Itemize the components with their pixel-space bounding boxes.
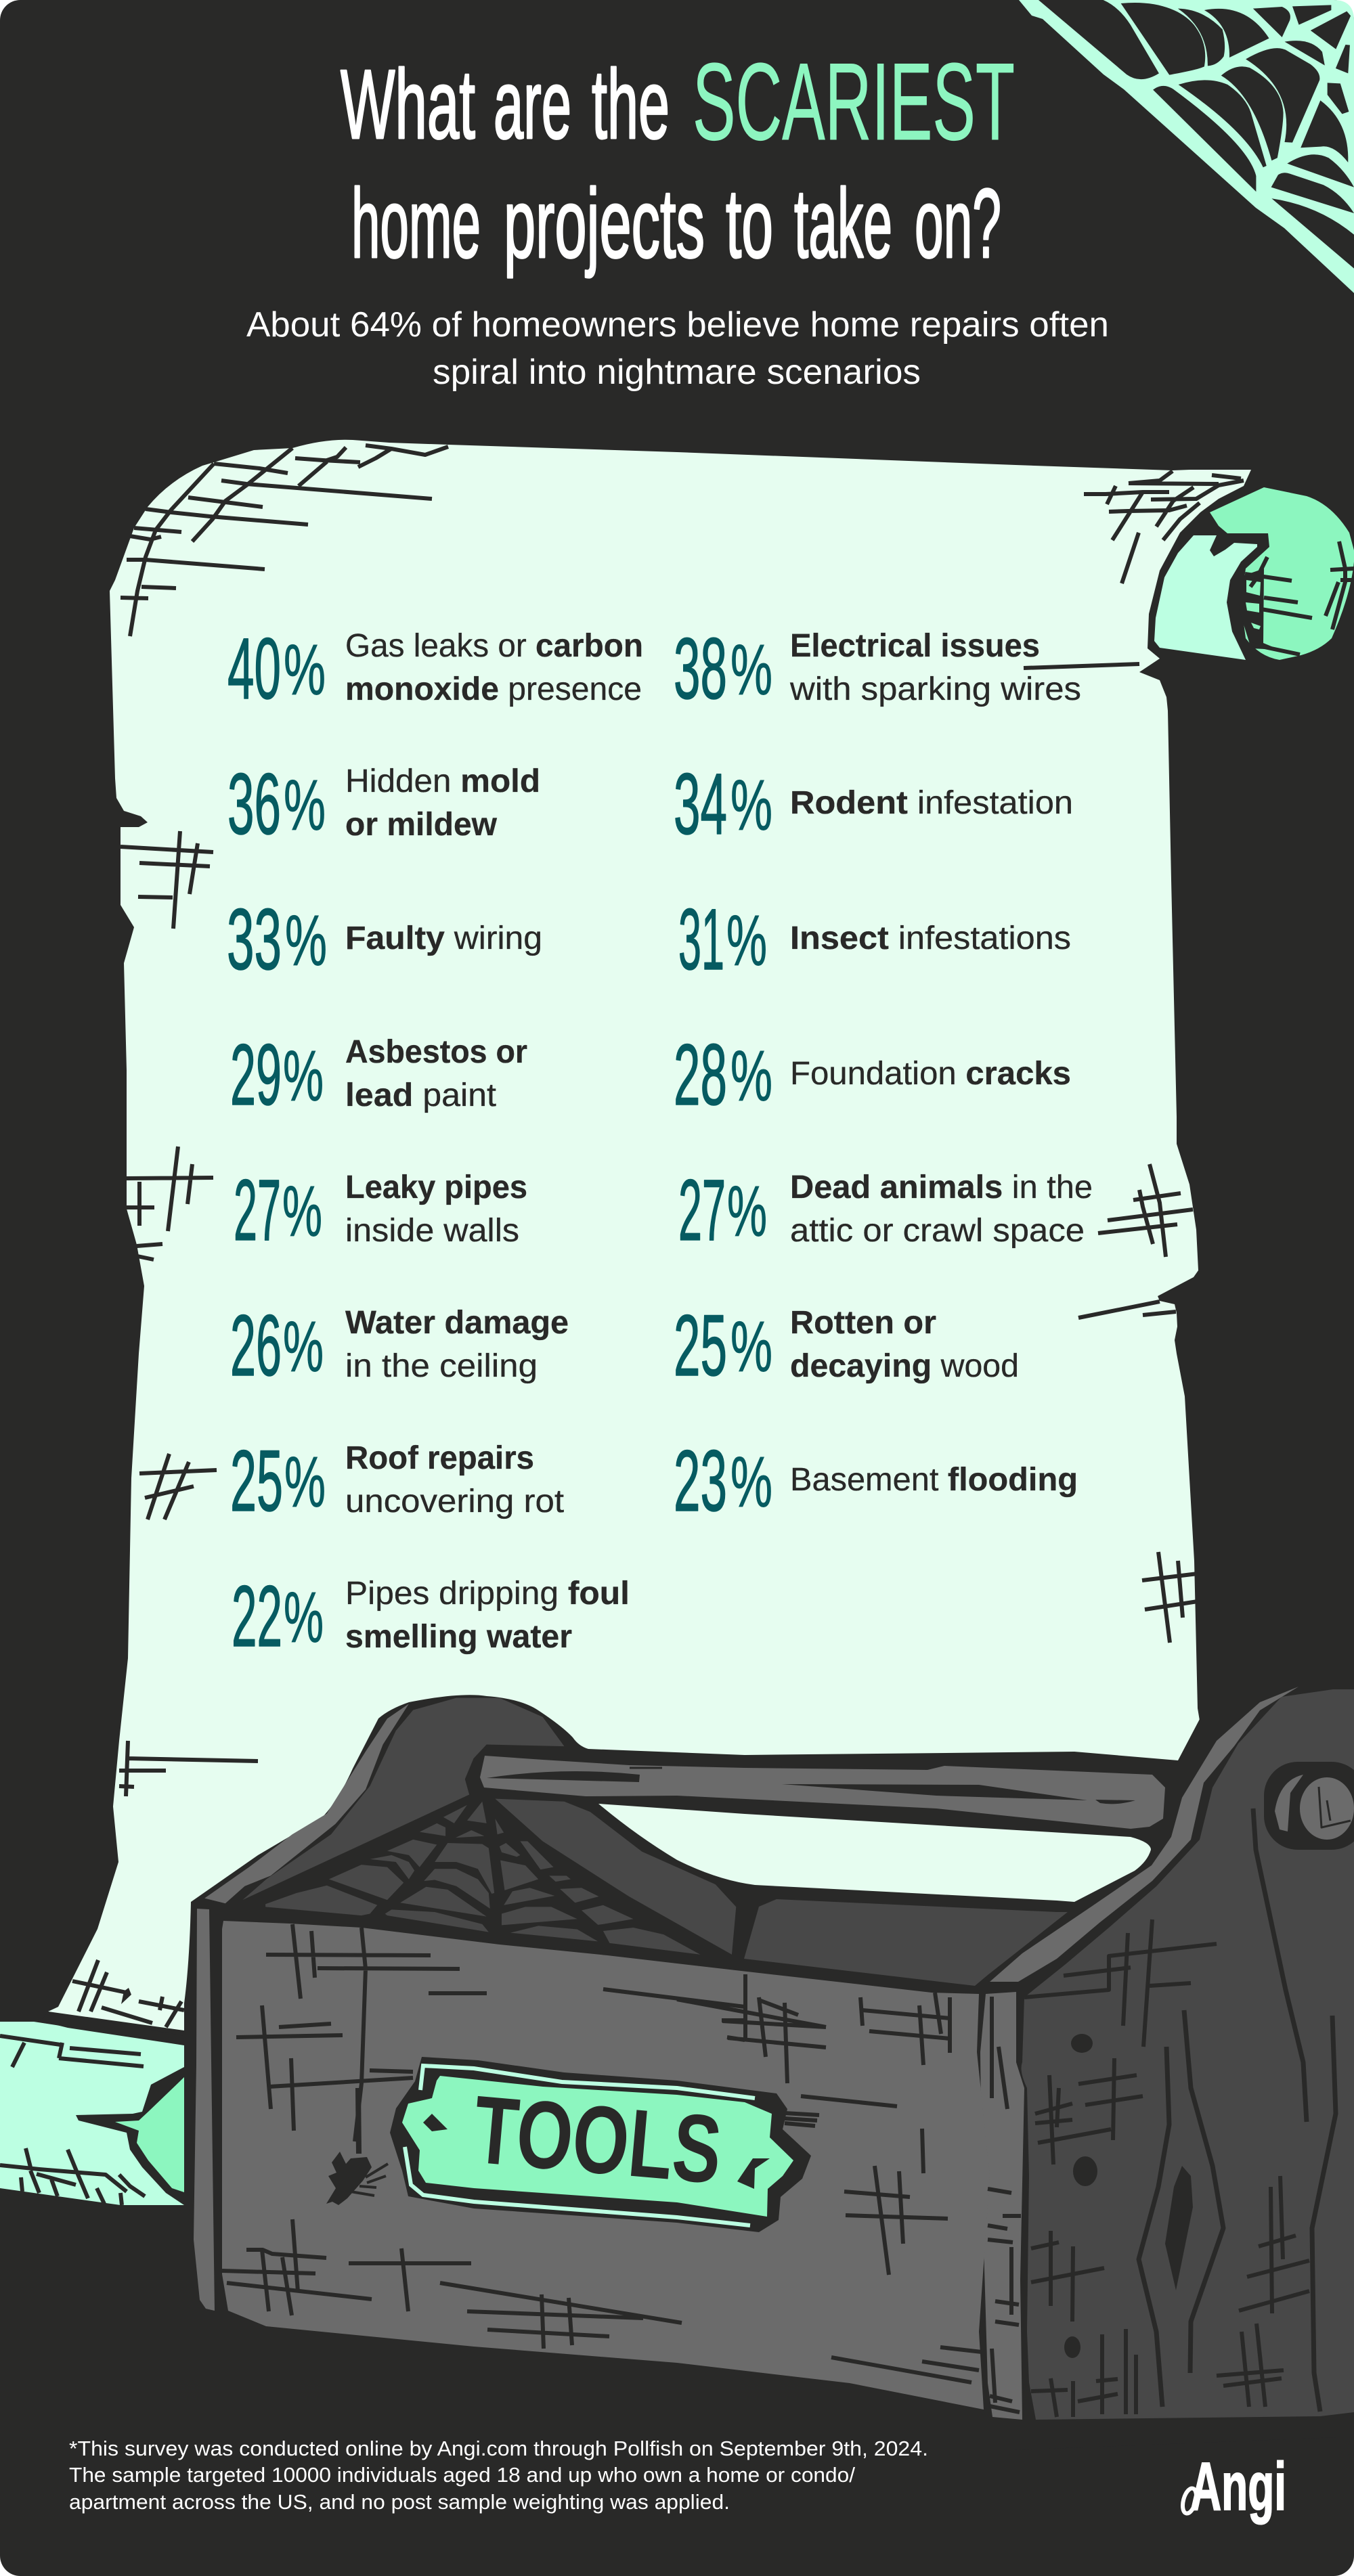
item: 38% electrical issues: % (730, 630, 772, 710)
paper gap under handle (598, 1804, 1151, 1902)
item: 38% electrical issues: Electrical issues (790, 628, 1040, 664)
toolbox front panel (222, 1921, 990, 2410)
item: 29% asbestos: % (283, 1036, 324, 1116)
item: 28% foundation cracks (674, 1027, 1071, 1124)
subtitle: spiral into nightmare scenarios (433, 353, 921, 392)
item: 31% insect infestations: % (726, 901, 767, 981)
title: the (592, 49, 670, 159)
sign: tools (390, 2057, 811, 2232)
icon: handle bolt (1264, 1762, 1354, 1850)
toolbox side panel (1022, 1689, 1354, 2420)
item: 22% pipes dripping: smelling water (345, 1619, 572, 1655)
item: 23% basement flooding: 23 (674, 1433, 727, 1530)
crack lines on parchment right side (1078, 1164, 1198, 1643)
survey items (227, 621, 1093, 1665)
item: 22% pipes dripping (232, 1568, 630, 1665)
item: 36% hidden mold: 36 (227, 756, 281, 853)
crack lines on front panel (222, 1924, 1021, 2412)
title: SCARIEST (693, 41, 1015, 163)
toolbox corner strip (980, 1992, 1024, 2420)
title: home (351, 169, 481, 278)
item: 36% hidden mold: or mildew (345, 807, 498, 843)
sign: tools: TOOLS (470, 2076, 726, 2204)
item: 31% insect infestations (678, 891, 1071, 988)
footnote: *This survey was conducted online by Angi.com through Pollfish on September 9th, 2024. (69, 2437, 928, 2460)
item: 38% electrical issues (674, 621, 1081, 717)
item: 33% faulty wiring (227, 891, 542, 988)
icon: scroll bottom roll (0, 1960, 186, 2205)
logo: Angi (1180, 2449, 1286, 2525)
item: 29% asbestos: lead paint (345, 1078, 496, 1113)
item: 36% hidden mold: Hidden mold (345, 763, 540, 799)
item: 33% faulty wiring: Faulty wiring (345, 920, 542, 956)
item: 25% roof repairs: Roof repairs (345, 1440, 534, 1476)
item: 28% foundation cracks: Foundation cracks (790, 1056, 1071, 1092)
item: 33% faulty wiring: 33 (227, 891, 282, 988)
item: 29% asbestos: Asbestos or (345, 1034, 527, 1070)
item: 38% electrical issues: 38 (674, 621, 727, 717)
title: on? (915, 169, 1001, 278)
item: 27% leaky pipes (234, 1162, 527, 1259)
item: 28% foundation cracks: % (730, 1036, 772, 1116)
item: 22% pipes dripping: % (284, 1578, 324, 1658)
title: projects (504, 169, 705, 278)
title: What (341, 49, 475, 159)
icon: spider (326, 2088, 388, 2205)
footnote: The sample targeted 10000 individuals aged 18 and up who own a home or condo/ (69, 2463, 855, 2487)
item: 34% rodent infestation (674, 756, 1073, 853)
item: 29% asbestos (230, 1027, 527, 1124)
crack lines on parchment left side (119, 831, 258, 1796)
item: 26% water damage: 26 (230, 1297, 282, 1394)
item: 25% rotten wood: % (730, 1307, 772, 1387)
title (341, 41, 1015, 278)
item: 34% rodent infestation: 34 (674, 756, 727, 853)
item: 38% electrical issues: with sparking wires (789, 671, 1081, 707)
item: 40% gas leaks: Gas leaks or carbon (345, 628, 643, 664)
title: are (494, 49, 571, 159)
item: 27% dead animals: % (727, 1172, 767, 1251)
toolbox silhouette (184, 1679, 1354, 2450)
item: 25% roof repairs: 25 (230, 1433, 283, 1530)
subtitle: About 64% of homeowners believe home repairs often (246, 305, 1109, 345)
item: 40% gas leaks: % (284, 630, 326, 710)
item: 40% gas leaks: 40 (227, 621, 281, 717)
icon: scroll top roll (1154, 487, 1354, 660)
item: 31% insect infestations: Insect infestations (790, 920, 1071, 956)
item: 27% dead animals: attic or crawl space (790, 1213, 1085, 1249)
item: 25% roof repairs (230, 1433, 564, 1530)
item: 27% dead animals: 27 (678, 1162, 726, 1259)
item: 23% basement flooding (674, 1433, 1078, 1530)
item: 27% dead animals: Dead animals in the (790, 1170, 1093, 1205)
item: 26% water damage (230, 1297, 569, 1394)
item: 36% hidden mold (227, 756, 540, 853)
item: 27% leaky pipes: inside walls (345, 1213, 519, 1249)
toolbox right rim (990, 1687, 1298, 1982)
item: 26% water damage: Water damage (345, 1305, 569, 1341)
title: take (794, 169, 892, 278)
item: 27% dead animals (678, 1162, 1093, 1259)
toolbox left end cap with web (204, 1698, 736, 1955)
item: 23% basement flooding: Basement flooding (790, 1462, 1078, 1498)
item: 25% rotten wood: decaying wood (790, 1348, 1019, 1384)
item: 25% rotten wood (674, 1297, 1019, 1394)
item: 25% rotten wood: Rotten or (790, 1305, 936, 1341)
subtitle (246, 305, 1109, 392)
item: 25% roof repairs: % (284, 1442, 326, 1522)
crack lines on parchment top left (121, 445, 448, 636)
item: 27% leaky pipes: % (282, 1172, 322, 1251)
item: 40% gas leaks: monoxide presence (345, 671, 642, 707)
icon: corner spider web (1019, 0, 1354, 293)
item: 27% leaky pipes: 27 (234, 1162, 281, 1259)
crack lines on parchment top right (1024, 471, 1244, 668)
item: 26% water damage: in the ceiling (345, 1348, 538, 1384)
item: 33% faulty wiring: % (285, 901, 327, 981)
item: 31% insect infestations: 31 (678, 891, 724, 988)
item: 22% pipes dripping: 22 (232, 1568, 282, 1665)
icon: toolbox (184, 1679, 1354, 2450)
logo: Angi: Angi (1190, 2449, 1286, 2525)
item: 22% pipes dripping: Pipes dripping foul (345, 1576, 630, 1612)
footnote (69, 2437, 928, 2514)
item: 25% roof repairs: uncovering rot (345, 1484, 564, 1519)
toolbox inner back wall (744, 1899, 1068, 1986)
panel: parchment scroll (48, 440, 1251, 2030)
footnote: apartment across the US, and no post sample weighting was applied. (69, 2490, 730, 2514)
item: 23% basement flooding: % (730, 1442, 772, 1522)
item: 29% asbestos: 29 (230, 1027, 282, 1124)
item: 27% leaky pipes: Leaky pipes (345, 1170, 527, 1205)
item: 26% water damage: % (283, 1307, 324, 1387)
item: 34% rodent infestation: % (730, 765, 772, 845)
item: 28% foundation cracks: 28 (674, 1027, 727, 1124)
item: 40% gas leaks (227, 621, 643, 717)
item: 34% rodent infestation: Rodent infestation (790, 785, 1073, 821)
toolbox handle (480, 1756, 1165, 1829)
title: to (726, 169, 773, 278)
item: 36% hidden mold: % (284, 765, 326, 845)
toolbox front left strip (194, 1909, 215, 2311)
wood grain and cracks on side panel (1024, 1808, 1336, 2417)
item: 25% rotten wood: 25 (674, 1297, 727, 1394)
